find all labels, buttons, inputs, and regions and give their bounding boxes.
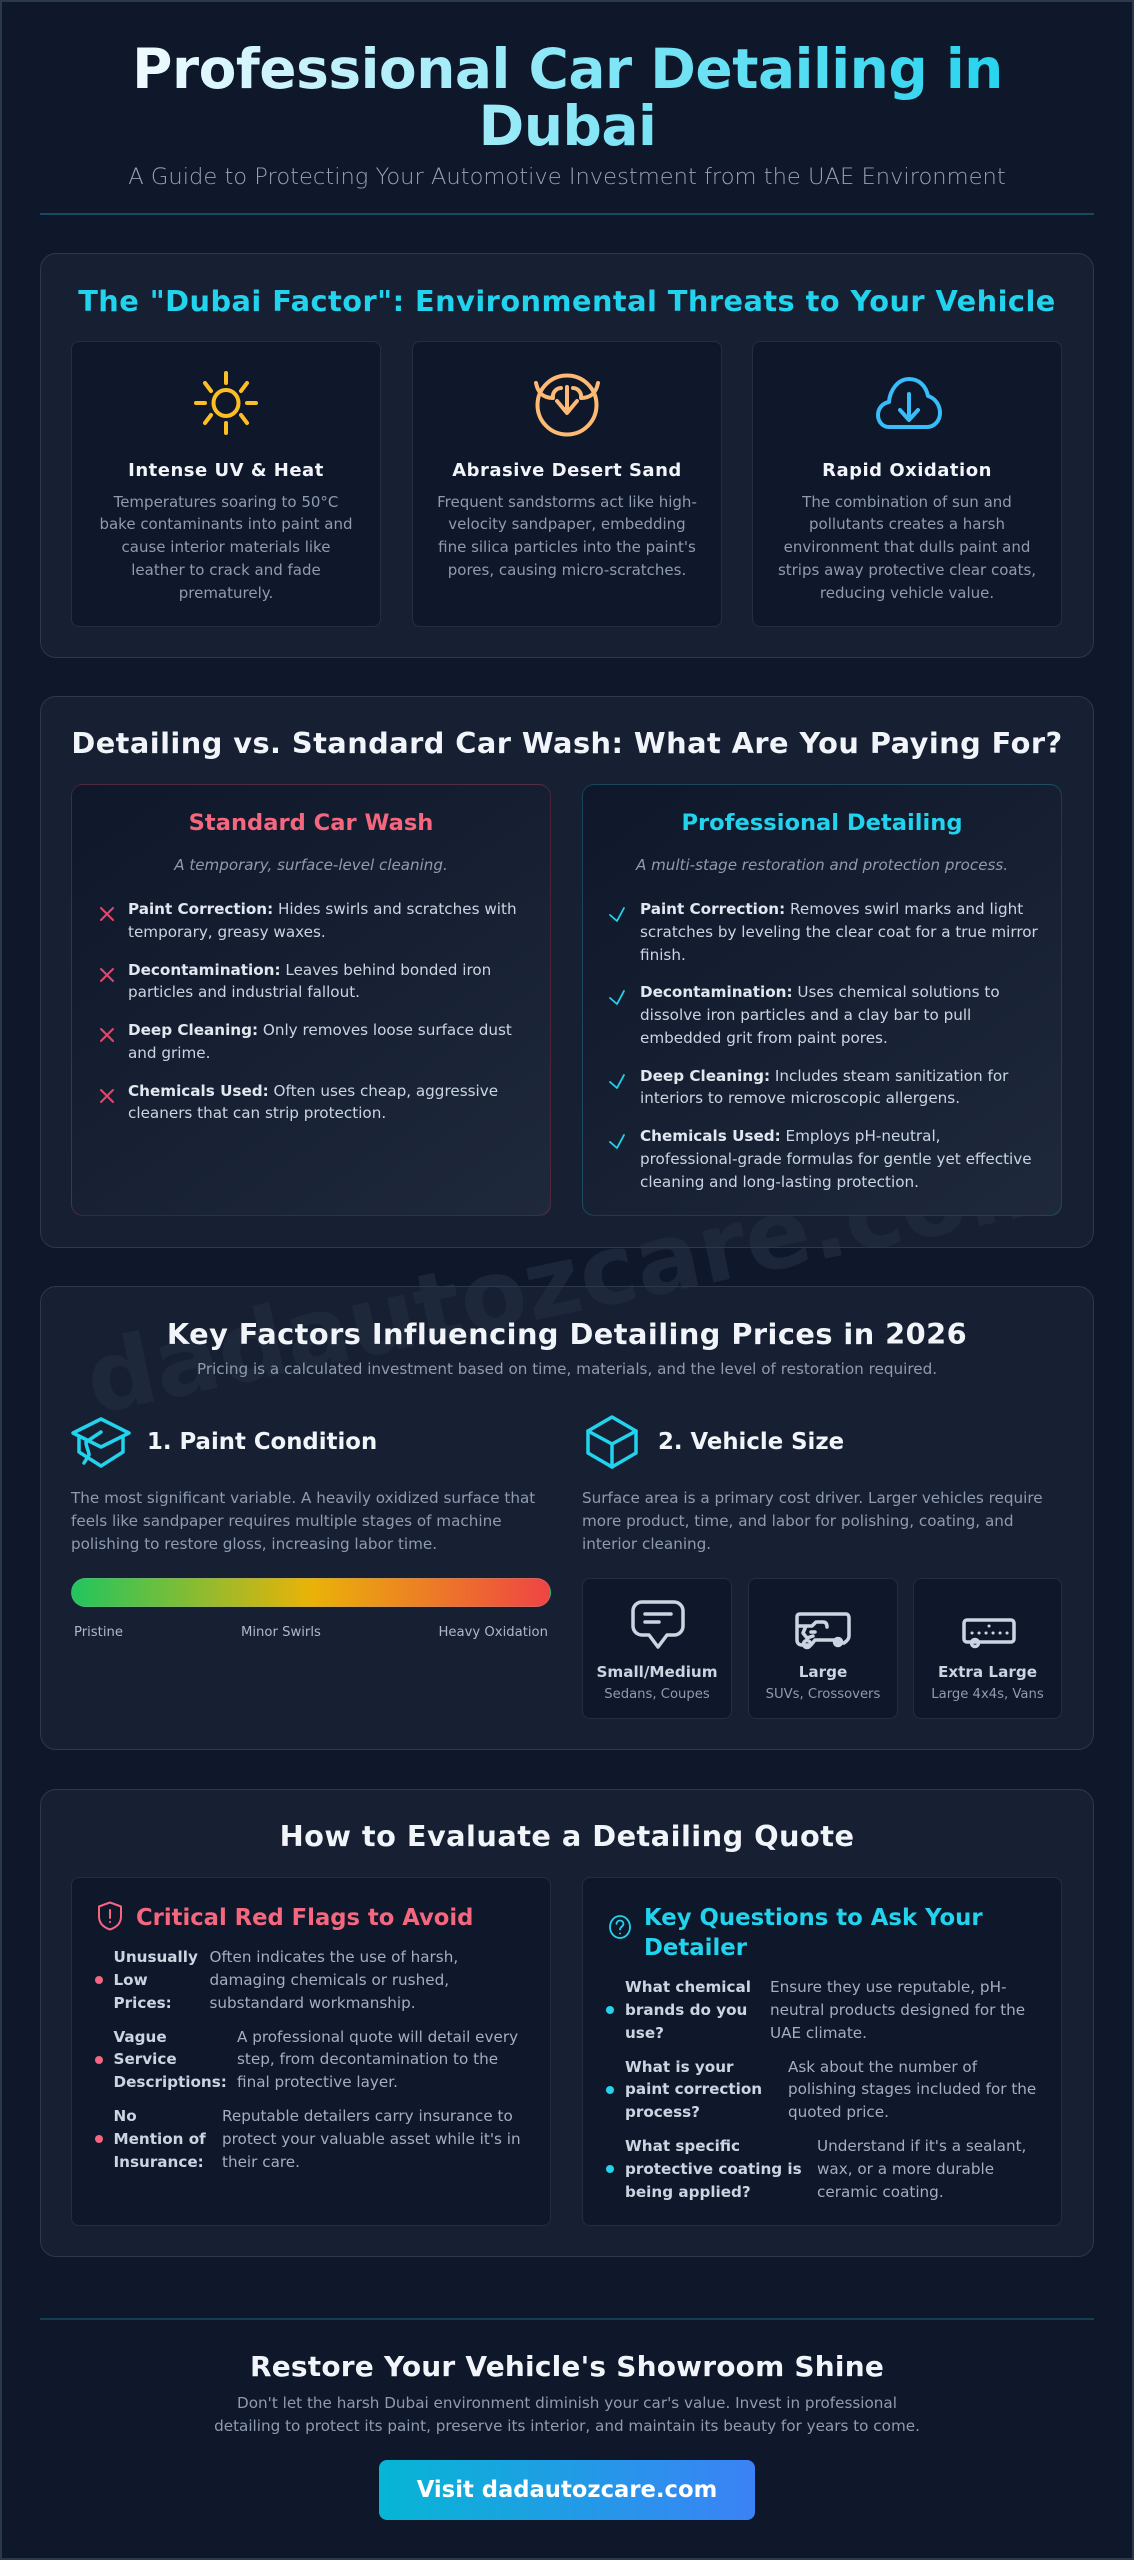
list item: Deep Cleaning: Only removes loose surface dust — [128, 1021, 512, 1039]
card tagline: A multi-stage restoration and protection process. — [636, 856, 1008, 874]
list item: Paint Correction: Hides swirls and scratches with — [128, 900, 517, 918]
list item — [100, 1021, 512, 1062]
card text: fine silica particles into the paint's — [438, 538, 696, 556]
list item — [100, 1082, 498, 1122]
label: use? — [625, 2024, 664, 2042]
header — [128, 37, 1006, 190]
watermark: dadautozcare.com — [76, 1120, 1074, 1436]
card text: Temperatures soaring to 50°C — [114, 492, 338, 510]
card tagline: A temporary, surface-level cleaning. — [174, 856, 448, 874]
explanation: Ask about the number of — [788, 2058, 977, 2076]
explanation: neutral products designed for the — [770, 2001, 1025, 2019]
card: key questions — [582, 1877, 1062, 2226]
explanation — [788, 2056, 1036, 2124]
explanation: their care. — [222, 2152, 300, 2170]
explanation: damaging chemicals or rushed, — [210, 1971, 449, 1989]
label: Prices: — [114, 1994, 172, 2012]
label — [114, 1948, 198, 2012]
list item: professional-grade formulas for gentle yet effective — [640, 1150, 1032, 1168]
label — [114, 2105, 206, 2173]
scale label: Minor Swirls — [241, 1625, 321, 1640]
question item — [583, 2056, 1061, 2124]
list item: finish. — [640, 946, 686, 964]
list item: Chemicals Used: Often uses cheap, aggressive — [128, 1082, 498, 1100]
bullet — [95, 2056, 103, 2064]
icon: large vehicle — [795, 1612, 851, 1650]
icon: check — [609, 1074, 625, 1089]
icon: small vehicle — [631, 1600, 685, 1649]
card text — [437, 492, 697, 579]
explanation: wax, or a more durable — [817, 2160, 994, 2178]
label: being applied? — [625, 2182, 751, 2200]
card: large — [748, 1578, 898, 1719]
intro text: Pricing is a calculated investment based on time, materials, and the level of restoration required. — [197, 1360, 937, 1378]
card heading: Key Questions to Ask Your — [644, 1904, 983, 1930]
icon: cross — [100, 1028, 114, 1042]
icon: cross — [100, 907, 114, 921]
explanation — [222, 2105, 521, 2173]
explanation: step, from decontamination to the — [237, 2050, 498, 2068]
list item — [609, 1066, 1008, 1107]
card text: velocity sandpaper, embedding — [448, 515, 686, 533]
icon: sun — [194, 371, 258, 435]
text: call to action: detailing to protect its paint, preserve its interior, and maintain its beauty for years to come. — [214, 2417, 920, 2435]
text: paint condition — [70, 1489, 535, 1552]
heading: paint condition: 1. Paint Condition — [147, 1428, 377, 1454]
list item — [100, 960, 491, 1001]
call to action — [40, 2345, 1094, 2525]
label: process? — [625, 2103, 700, 2121]
text: vehicle size: more product, time, and labor for polishing, coating, and — [582, 1512, 1014, 1530]
icon: graduation cap — [71, 1417, 131, 1468]
card heading: Critical Red Flags to Avoid — [136, 1904, 473, 1930]
list item: cleaners that can strip protection. — [128, 1104, 386, 1122]
flag item — [95, 2028, 518, 2091]
card title: Intense UV & Heat — [128, 460, 324, 480]
list item — [609, 983, 1000, 1047]
explanation: substandard workmanship. — [210, 1994, 416, 2012]
icon: cube — [586, 1415, 638, 1469]
heading: comparison: Detailing vs. Standard Car Wash: What Are You Paying For? — [71, 726, 1063, 760]
explanation: Understand if it's a sealant, — [817, 2137, 1026, 2155]
sublabel: Sedans, Coupes — [604, 1687, 710, 1702]
list item: interiors to remove microscopic allergens. — [640, 1089, 960, 1107]
heading: price factors: Key Factors Influencing Detailing Prices in 2026 — [167, 1317, 967, 1351]
label: Extra Large — [938, 1663, 1037, 1681]
card text — [778, 492, 1036, 602]
icon: check — [609, 990, 625, 1005]
sublabel: Large 4x4s, Vans — [931, 1687, 1044, 1702]
list item — [100, 900, 517, 941]
flag item — [95, 1948, 458, 2012]
button — [379, 2460, 755, 2520]
card text: reducing vehicle value. — [820, 584, 994, 602]
list item — [609, 1127, 1032, 1190]
list item: Decontamination: Leaves behind bonded iron — [128, 960, 491, 978]
scale label: Heavy Oxidation — [439, 1625, 548, 1640]
explanation: Often indicates the use of harsh, — [210, 1948, 458, 1966]
card text: pores, causing micro-scratches. — [448, 561, 686, 579]
card text: environment that dulls paint and — [784, 538, 1030, 556]
label: Small/Medium — [596, 1663, 718, 1681]
label: Mention of — [114, 2130, 206, 2148]
card heading: Standard Car Wash — [189, 810, 433, 836]
bullet — [606, 2086, 614, 2094]
label — [625, 2056, 762, 2124]
icon: cross — [100, 968, 114, 982]
explanation: polishing stages included for the — [788, 2080, 1036, 2098]
card: standard car wash — [71, 784, 551, 1216]
title: Dubai — [479, 94, 656, 158]
question item — [583, 2135, 1061, 2203]
label: Descriptions: — [114, 2073, 227, 2091]
bullet — [95, 1976, 103, 1984]
explanation: UAE climate. — [770, 2024, 867, 2042]
card heading: Detailer — [644, 1934, 747, 1960]
scale label: Pristine — [74, 1625, 123, 1640]
button: Visit dadautozcare.com — [417, 2477, 717, 2503]
list item: dissolve iron particles and a clay bar to pull — [640, 1006, 971, 1024]
card heading — [644, 1902, 983, 1962]
chart: paint condition scale — [71, 1578, 551, 1640]
card text: prematurely. — [179, 584, 273, 602]
heading: vehicle size: 2. Vehicle Size — [658, 1428, 844, 1454]
list item: particles and industrial fallout. — [128, 983, 360, 1001]
explanation: Ensure they use reputable, pH- — [770, 1978, 1006, 1996]
explanation: quoted price. — [788, 2103, 889, 2121]
list item: Chemicals Used: Employs pH-neutral, — [640, 1127, 940, 1145]
card text: Frequent sandstorms act like high- — [437, 492, 697, 510]
list item: cleaning and long-lasting protection. — [640, 1172, 919, 1190]
explanation — [770, 1976, 1025, 2044]
card text: leather to crack and fade — [131, 561, 321, 579]
list item — [609, 900, 1038, 964]
label: Unusually — [114, 1948, 198, 1966]
card text: The combination of sun and — [802, 492, 1012, 510]
panel: evaluate a quote — [40, 1789, 1094, 2257]
flag item — [72, 2105, 550, 2173]
list item: Paint Correction: Removes swirl marks and light — [640, 900, 1023, 918]
card: red flags — [71, 1877, 551, 2226]
card: desert sand — [412, 341, 722, 627]
title — [113, 41, 1022, 154]
explanation — [237, 2026, 518, 2094]
card text: pollutants creates a harsh — [809, 515, 1005, 533]
card title: Abrasive Desert Sand — [452, 460, 682, 480]
bullet — [95, 2135, 103, 2143]
explanation — [817, 2135, 1026, 2203]
card title: Rapid Oxidation — [822, 460, 992, 480]
explanation: A professional quote will detail every — [237, 2028, 518, 2046]
label: Service — [114, 2050, 177, 2068]
label: No — [114, 2107, 137, 2125]
gradient bar — [71, 1578, 551, 1607]
list item: scratches by leveling the clear coat for a true mirror — [640, 923, 1038, 941]
icon: check — [609, 907, 625, 922]
label: Large — [799, 1663, 847, 1681]
panel: comparison — [40, 696, 1094, 1248]
panel: price factors — [40, 1286, 1094, 1750]
title: Professional Car Detailing in — [132, 37, 1003, 101]
icon: cloud download — [876, 377, 942, 429]
label: What is your — [625, 2058, 734, 2076]
text: vehicle size — [582, 1489, 1043, 1552]
card: oxidation — [752, 341, 1062, 627]
card text: cause interior materials like — [122, 538, 330, 556]
explanation: final protective layer. — [237, 2073, 398, 2091]
icon: check — [609, 1134, 625, 1149]
icon: shield — [98, 1902, 122, 1930]
label — [114, 2026, 227, 2094]
text: call to action: Don't let the harsh Dubai environment diminish your car's value. Invest in professional — [237, 2394, 897, 2412]
label: brands do you — [625, 2001, 747, 2019]
panel: Dubai factor — [40, 253, 1094, 658]
sublabel: SUVs, Crossovers — [766, 1687, 880, 1702]
card: professional detailing — [582, 784, 1062, 1216]
label: Vague — [114, 2028, 167, 2046]
list item: Decontamination: Uses chemical solutions to — [640, 983, 1000, 1001]
bullet — [606, 2165, 614, 2173]
list item: Deep Cleaning: Includes steam sanitization for — [640, 1066, 1008, 1084]
list item: and grime. — [128, 1044, 210, 1062]
icon: sand — [534, 374, 600, 436]
card text — [99, 492, 353, 602]
list item: embedded grit from paint pores. — [640, 1029, 888, 1047]
text: call to action — [40, 2392, 1094, 2438]
text: paint condition: polishing to restore gloss, increasing labor time. — [71, 1534, 437, 1552]
explanation: Reputable detailers carry insurance to — [222, 2107, 513, 2125]
explanation — [210, 1948, 458, 2012]
heading: evaluate a quote: How to Evaluate a Detailing Quote — [280, 1819, 854, 1853]
text: paint condition: The most significant variable. A heavily oxidized surface that — [71, 1489, 535, 1507]
label: paint correction — [625, 2080, 762, 2098]
list item: temporary, greasy waxes. — [128, 923, 326, 941]
text: vehicle size: Surface area is a primary cost driver. Larger vehicles require — [582, 1489, 1043, 1507]
icon: cross — [100, 1089, 114, 1103]
card text: bake contaminants into paint and — [99, 515, 353, 533]
explanation: ceramic coating. — [817, 2182, 944, 2200]
subtitle: A Guide to Protecting Your Automotive Investment from the UAE Environment — [128, 164, 1006, 190]
label: What specific — [625, 2137, 740, 2155]
card: UV and heat — [71, 341, 381, 627]
label — [625, 2135, 802, 2203]
bullet — [606, 2006, 614, 2014]
heading: Dubai factor: The "Dubai Factor": Environmental Threats to Your Vehicle — [78, 284, 1056, 318]
label: Insurance: — [114, 2152, 204, 2170]
text: vehicle size: interior cleaning. — [582, 1534, 711, 1552]
card: small or medium — [582, 1578, 732, 1719]
card text: strips away protective clear coats, — [778, 561, 1036, 579]
label: Low — [114, 1971, 148, 1989]
text: paint condition: feels like sandpaper requires multiple stages of machine — [71, 1512, 502, 1530]
card: extra large — [913, 1578, 1062, 1719]
label: What chemical — [625, 1978, 751, 1996]
label: protective coating is — [625, 2160, 802, 2178]
icon: extra large vehicle — [962, 1618, 1016, 1648]
card heading: Professional Detailing — [681, 810, 963, 836]
label — [625, 1976, 751, 2044]
question item — [583, 1976, 1061, 2044]
icon: question mark — [608, 1915, 632, 1939]
explanation: protect your valuable asset while it's in — [222, 2130, 521, 2148]
heading: call to action: Restore Your Vehicle's Showroom Shine — [250, 2350, 884, 2383]
